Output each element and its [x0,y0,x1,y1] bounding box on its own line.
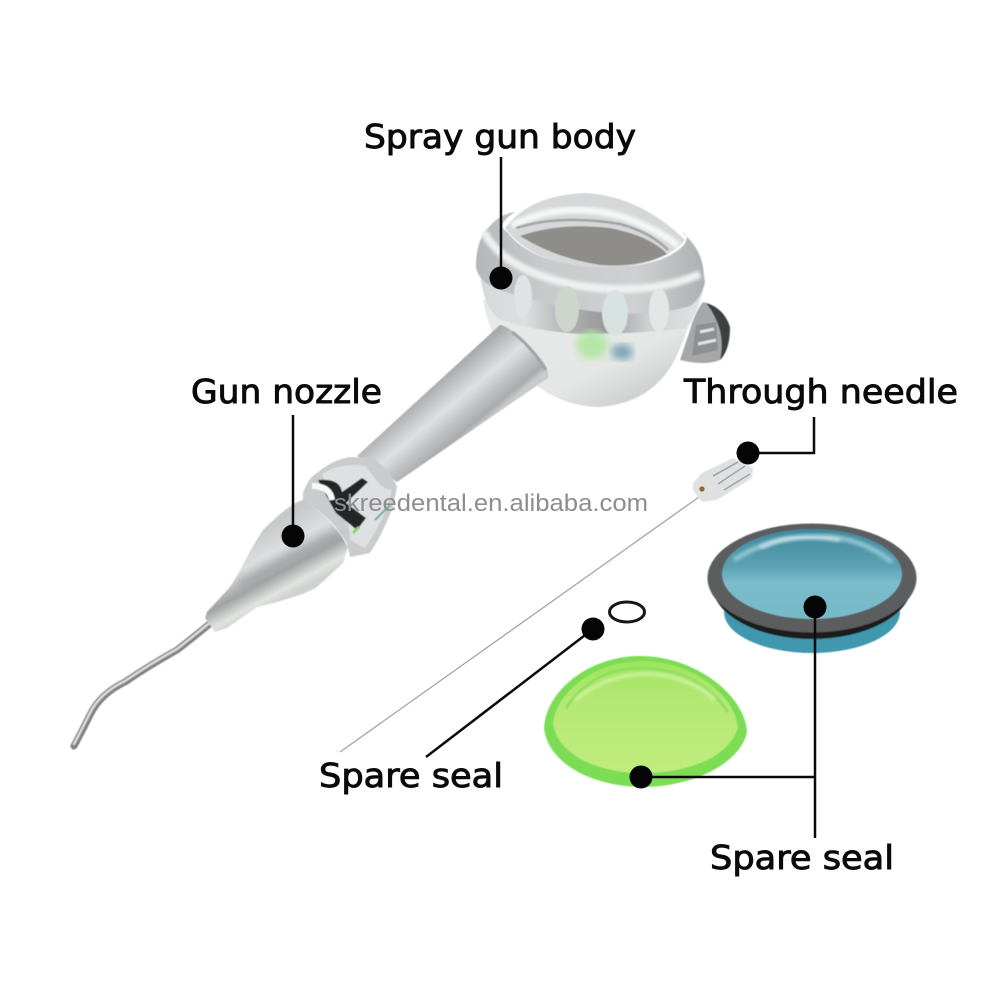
finger grip ovals [514,275,669,336]
tip [74,622,212,746]
label: spare seal left: Spare seal [319,756,503,795]
lower bowl [483,300,695,407]
icon: blue dome seal [708,524,916,653]
watermark: skreedental.en.alibaba.com [334,490,648,517]
label: spray gun body: Spray gun body [364,117,636,156]
callout: spray gun body [490,157,512,290]
callout: dome spare seals [630,596,826,838]
icon: gun nozzle [74,457,397,746]
label: through needle: Through needle [683,372,958,411]
cone [205,500,348,632]
icon: side air connector [680,302,730,363]
icon: O-ring spare seal [610,602,644,622]
grip band [480,260,705,334]
label: spare seal right: Spare seal [710,838,894,877]
callout: O-ring spare seal [426,618,604,757]
icon: green dome seal [544,656,747,787]
callout: gun nozzle [282,415,304,548]
icon: through needle [340,458,753,752]
silver rim [476,212,705,314]
label: gun nozzle: Gun nozzle [191,372,382,411]
collar [303,457,397,557]
icon: spray gun body [476,193,705,407]
glass dome [505,193,685,268]
callout: through needle [736,417,814,464]
icon: handle tube [357,325,548,482]
